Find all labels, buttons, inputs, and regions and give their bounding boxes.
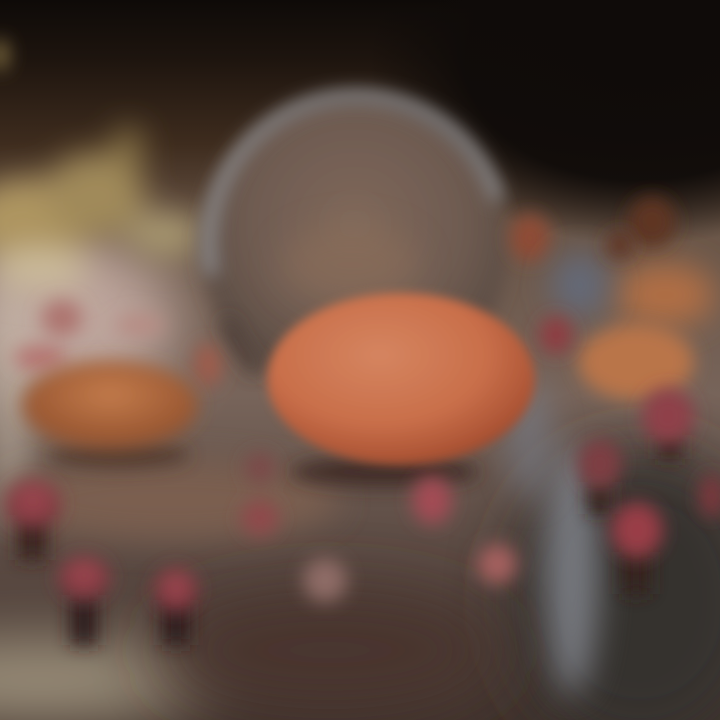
- red dots with dark stems: [5, 316, 720, 645]
- right orange capsules: [510, 196, 715, 400]
- left orange capsule: [22, 361, 198, 468]
- yellow powder cloud: [0, 126, 203, 290]
- large disc: [203, 96, 507, 398]
- shadow under large capsule: [290, 457, 480, 487]
- large orange capsule: [267, 293, 535, 465]
- pink blotches left: [14, 300, 222, 387]
- small glow top left: [0, 39, 9, 71]
